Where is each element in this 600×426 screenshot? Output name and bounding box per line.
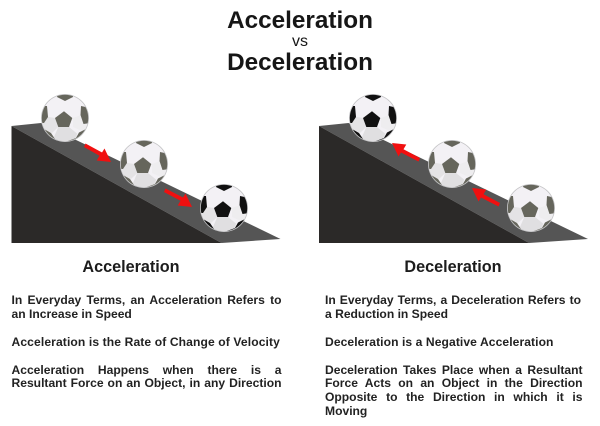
text: acceleration everyday terms	[12, 293, 282, 321]
title	[227, 7, 373, 76]
text: deceleration resultant force	[325, 362, 582, 418]
text: deceleration resultant force: Opposite to the Direction in which it is	[325, 390, 582, 404]
text: deceleration everyday terms: In Everyday Terms, a Deceleration Refers to	[325, 293, 581, 307]
text: acceleration resultant force: Acceleration Happens when there is a	[12, 362, 282, 376]
text: deceleration everyday terms	[325, 293, 581, 321]
arrow: left top, down the slope	[84, 144, 111, 162]
text: acceleration everyday terms: an Increase in Speed	[12, 307, 132, 321]
right ball 2: faded	[427, 139, 477, 189]
text: acceleration rate of change: Acceleration is the Rate of Change of Velocity	[12, 335, 280, 349]
left ball 3: dark	[199, 183, 249, 233]
right ball 1: dark	[348, 93, 398, 143]
text: acceleration resultant force: Resultant Force on an Object, in any Direction	[12, 376, 282, 390]
text: deceleration resultant force: Force Acts on an Object in the Direction	[325, 376, 582, 390]
arrow: right bottom, up the slope	[472, 188, 500, 206]
arrow: right top, up the slope	[392, 143, 420, 162]
right ball 3: faded	[506, 183, 556, 233]
text: deceleration resultant force: Deceleration Takes Place when a Resultant	[325, 362, 582, 376]
arrow: left bottom, down the slope	[164, 188, 192, 207]
text: deceleration resultant force: Moving	[325, 404, 367, 418]
text: deceleration everyday terms: a Reduction in Speed	[325, 307, 448, 321]
heading: acceleration: Acceleration	[82, 258, 180, 276]
left ball 1: faded	[40, 93, 90, 143]
heading: deceleration: Deceleration	[404, 258, 502, 276]
text: acceleration resultant force	[12, 362, 282, 390]
title: Acceleration	[227, 7, 373, 34]
title: Deceleration	[227, 49, 373, 76]
text: deceleration negative acceleration: Deceleration is a Negative Acceleration	[325, 335, 554, 349]
left ball 2: faded	[119, 139, 169, 189]
text: acceleration everyday terms: In Everyday Terms, an Acceleration Refers to	[12, 293, 282, 307]
title: vs	[292, 33, 308, 50]
right ramp	[319, 123, 588, 243]
left ramp	[12, 123, 280, 243]
